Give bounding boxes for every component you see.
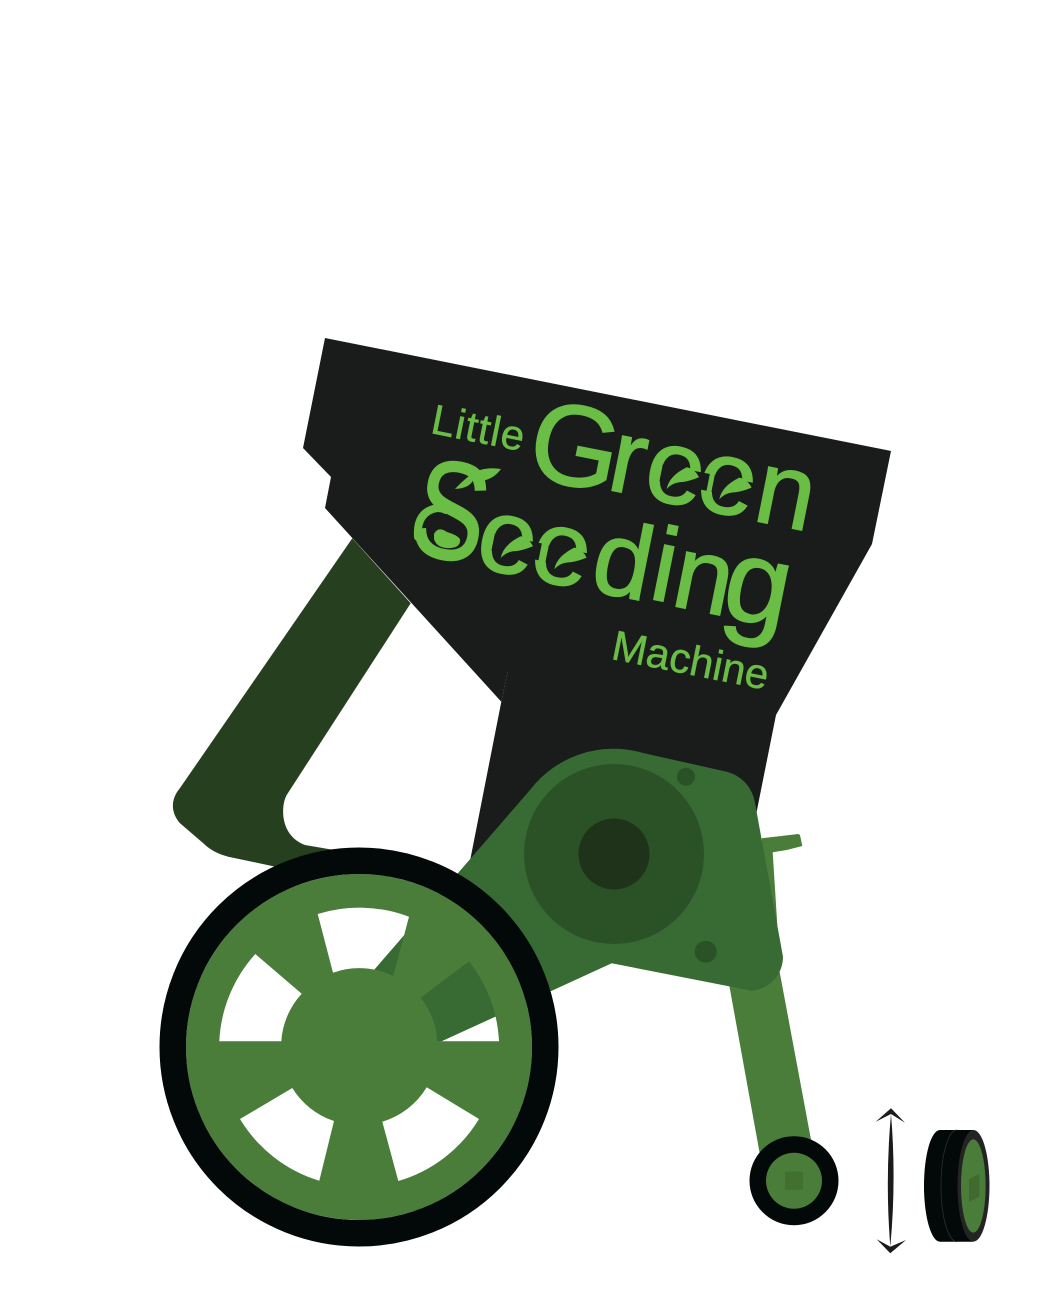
word: Little: Little	[428, 396, 529, 460]
push handle arm	[173, 538, 411, 872]
word: Green	[519, 375, 827, 554]
word: Machine: Machine	[608, 621, 773, 699]
word: Green: n	[746, 428, 827, 554]
lever handle	[762, 834, 802, 925]
word: Seeding	[400, 426, 804, 654]
word: Green: G	[519, 375, 632, 518]
hopper body	[303, 338, 891, 861]
sprout leaf on S	[455, 468, 501, 489]
plate bolts	[677, 768, 717, 963]
spiral flourish on S	[418, 508, 446, 537]
word: Seeding: i	[642, 506, 688, 625]
leaves inside the letter e	[491, 465, 762, 572]
word: Green: e	[636, 405, 717, 531]
gear disc	[524, 764, 704, 944]
word: Seeding: e	[522, 486, 603, 612]
word: Seeding: g	[714, 512, 804, 654]
word: Seeding: S	[400, 426, 502, 595]
word: Green: r	[600, 397, 658, 518]
large wheel	[173, 861, 545, 1233]
rear arm	[728, 970, 812, 1155]
small wheel	[750, 1136, 838, 1225]
side view wheel	[924, 1130, 990, 1242]
side plate	[360, 749, 783, 1060]
word: Seeding: n	[664, 513, 745, 639]
word: Green: e	[688, 415, 769, 541]
logo title	[400, 375, 827, 699]
seed in S	[434, 529, 460, 548]
word: Seeding: e	[468, 474, 549, 600]
word: Seeding: d	[583, 498, 664, 624]
height arrow	[876, 1108, 906, 1253]
